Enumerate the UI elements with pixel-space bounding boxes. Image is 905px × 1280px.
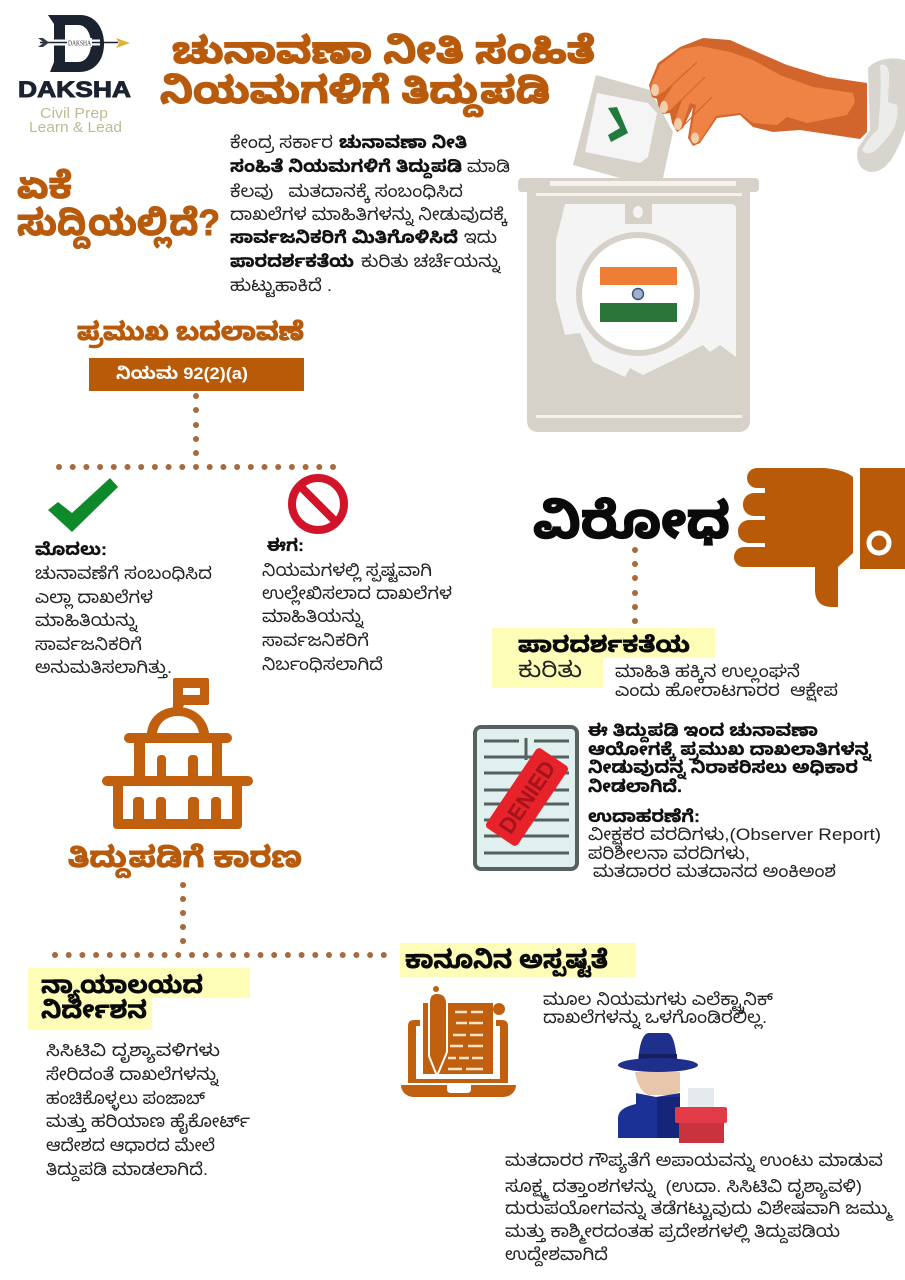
ballot paper [573, 75, 673, 178]
text block: original rules: ಮೂಲ ನಿಯಮಗಳು ಎಲೆಕ್ಟ್ರಾನಿಕ್ [543, 990, 774, 1014]
text block: why in the news: ಸಂಹಿತೆ ನಿಯಮಗಳಿಗೆ ತಿದ್ದುಪಡಿ [230, 157, 462, 179]
text block: election commission power: ಆಯೋಗಕ್ಕೆ ಪ್ರಮುಖ ದಾಖಲಾತಿಗಳನ್ನ [588, 740, 872, 762]
heading: why in the news: ಸುದ್ದಿಯಲ್ಲಿದೆ? [17, 202, 220, 249]
text block: why in the news: ಚುನಾವಣಾ ನೀತಿ [339, 133, 467, 152]
icon: government building [102, 678, 253, 829]
text block: why in the news: ಕೆಲವು ಮತದಾನಕ್ಕೆ ಸಂಬಂಧಿಸಿದ [230, 182, 463, 204]
callout: about transparency: ಪಾರದರ್ಶಕತೆಯ [518, 632, 690, 657]
text block: now: ಸಾರ್ವಜನಿಕರಿಗೆ [262, 631, 369, 650]
callout: legal ambiguity [400, 943, 636, 978]
text block: election commission power [588, 721, 872, 796]
heading: why in the news [17, 165, 220, 249]
dotted connector: reasons [52, 882, 387, 958]
text block: court direction: ಹಂಚಿಕೊಳ್ಳಲು ಪಂಜಾಬ್ [46, 1089, 206, 1111]
text block: original rules [543, 990, 774, 1030]
text block: voter privacy: ಸೂಕ್ಷ್ಮ ದತ್ತಾಂಶಗಳನ್ನು (ಉದಾ. ಸಿಸಿಟಿವಿ ದೃಶ್ಯಾವಳಿ) [505, 1177, 862, 1201]
callout: court direction: ನಿರ್ದೇಶನ [41, 997, 147, 1024]
dotted connector: opposition [632, 547, 638, 624]
text block: before: ಎಲ್ಲಾ ದಾಖಲೆಗಳ [35, 588, 153, 610]
title: ನಿಯಮಗಳಿಗೆ ತಿದ್ದುಪಡಿ [160, 70, 550, 117]
dotted connector: rule to before and now [56, 393, 336, 470]
text block: court direction: ಸಿಸಿಟಿವಿ ದೃಶ್ಯಾವಳಿಗಳು [46, 1041, 220, 1064]
text block: before: ಅನುಮತಿಸಲಾಗಿತ್ತು. [35, 658, 172, 679]
callout: court direction: ನ್ಯಾಯಾಲಯದ [41, 972, 203, 1004]
text block: why in the news: ಪಾರದರ್ಶಕತೆಯ [230, 252, 354, 271]
icon: prohibited sign [292, 478, 344, 530]
text block: why in the news: ಇದು [464, 228, 497, 247]
text block: why in the news: ಸಾರ್ವಜನಿಕರಿಗೆ ಮಿತಿಗೊಳಿಸಿದೆ [230, 228, 458, 247]
text block: now: ಈಗ: [267, 536, 304, 555]
text block: original rules: ದಾಖಲೆಗಳನ್ನು ಒಳಗೊಂಡಿರಲಿಲ್ಲ. [543, 1008, 767, 1030]
text block: court direction: ಸೇರಿದಂತೆ ದಾಖಲೆಗಳನ್ನು [46, 1065, 219, 1087]
text block: now: ನಿಯಮಗಳಲ್ಲಿ ಸ್ಪಷ್ಟವಾಗಿ [262, 561, 432, 583]
text block: why in the news [230, 133, 510, 298]
logo: Daksha Civil Prep: DAKSHA [68, 40, 91, 48]
icon: thumbs down [734, 468, 905, 607]
icon: spy with ballot box [618, 1033, 727, 1143]
text block: voter privacy: ಮತ್ತು ಕಾಶ್ಮೀರದಂತಹ ಪ್ರದೇಶಗಳಲ್ಲಿ ತಿದ್ದುಪಡಿಯ [505, 1222, 840, 1244]
logo: Daksha Civil Prep: Civil Prep [40, 105, 108, 122]
callout: about transparency: ಕುರಿತು [518, 657, 582, 682]
ballot box [518, 178, 759, 432]
text block: court direction: ಮತ್ತು ಹರಿಯಾಣ ಹೈಕೋರ್ಟ್ [46, 1112, 250, 1135]
logo: Daksha Civil Prep [18, 15, 131, 136]
callout: legal ambiguity: ಕಾನೂನಿನ ಅಸ್ಪಷ್ಟತೆ [405, 946, 608, 978]
text block: examples: ಮತದಾರರ ಮತದಾನದ ಅಂಕಿಅಂಶ [593, 862, 836, 881]
text block: activists' objection [615, 662, 838, 702]
heading: reason for amendment: ತಿದ್ದುಪಡಿಗೆ ಕಾರಣ [68, 842, 302, 878]
text block: court direction [46, 1041, 250, 1182]
denied stamp: DENIED [493, 756, 561, 838]
text block: why in the news: ಹುಟ್ಟುಹಾಕಿದೆ . [230, 276, 332, 298]
text block: activists' objection: ಎಂದು ಹೋರಾಟಗಾರರ ಆಕ್ಷೇಪ [615, 681, 838, 702]
text block: election commission power: ನೀಡುವುದನ್ನ ನಿರಾಕರಿಸಲು ಅಧಿಕಾರ [588, 758, 858, 780]
callout: about transparency [492, 628, 715, 688]
text block: before: ಸಾರ್ವಜನಿಕರಿಗೆ [35, 635, 142, 654]
callout: court direction [28, 968, 250, 1030]
text block: before: ಮಾಹಿತಿಯನ್ನು [35, 611, 138, 633]
text block: before: ಚುನಾವಣೆಗೆ ಸಂಬಂಧಿಸಿದ [35, 564, 212, 583]
title: ಚುನಾವಣಾ ನೀತಿ ಸಂಹಿತೆ [172, 30, 595, 71]
text block: before [35, 540, 212, 679]
text block: before: ಮೊದಲು: [35, 540, 107, 559]
heading: key changes: ಪ್ರಮುಖ ಬದಲಾವಣೆ [77, 318, 304, 348]
text block: examples: ಪರಿಶೀಲನಾ ವರದಿಗಳು, [588, 844, 750, 863]
text block: now: ನಿರ್ಬಂಧಿಸಲಾಗಿದೆ [262, 655, 383, 674]
logo: Daksha Civil Prep: DAKSHA [18, 77, 131, 102]
icon: green check mark [48, 478, 118, 532]
text block: voter privacy: ಮತದಾರರ ಗೌಪ್ಯತೆಗೆ ಅಪಾಯವನ್ನು ಉಂಟು ಮಾಡುವ [505, 1151, 883, 1173]
title [160, 30, 595, 117]
icon: laptop with document and pen [401, 986, 516, 1097]
heading: opposition: ವಿರೋಧ [533, 493, 730, 549]
text block: election commission power: ನೀಡಲಾಗಿದೆ. [588, 777, 682, 796]
text block: why in the news: ದಾಖಲೆಗಳ ಮಾಹಿತಿಗಳನ್ನು ನೀಡುವುದಕ್ಕೆ [230, 205, 508, 227]
text block: examples: ವೀಕ್ಷಕರ ವರದಿಗಳು,(Observer Report) [588, 825, 881, 846]
text block: now: ಉಲ್ಲೇಖಿಸಲಾದ ದಾಖಲೆಗಳ [262, 584, 452, 606]
banner: rule 92(2)(a): ನಿಯಮ 92(2)(a) [116, 364, 248, 383]
text block: now [262, 536, 452, 674]
text block: now: ಮಾಹಿತಿಯನ್ನು [262, 607, 364, 629]
text block: examples: ಉದಾಹರಣೆಗೆ: [588, 807, 700, 826]
heading: why in the news: ಏಕೆ [17, 165, 72, 206]
text block: court direction: ಆದೇಶದ ಆಧಾರದ ಮೇಲೆ [46, 1136, 215, 1155]
text block: voter privacy: ಉದ್ದೇಶವಾಗಿದೆ [505, 1245, 608, 1267]
text block: activists' objection: ಮಾಹಿತಿ ಹಕ್ಕಿನ ಉಲ್ಲಂಘನೆ [615, 662, 800, 684]
text block: court direction: ತಿದ್ದುಪಡಿ ಮಾಡಲಾಗಿದೆ. [46, 1160, 208, 1182]
text block: why in the news: ಮಾಡಿ [467, 157, 510, 176]
banner: rule 92(2)(a) [89, 358, 304, 391]
text block: why in the news: ಕೇಂದ್ರ ಸರ್ಕಾರ [230, 133, 333, 154]
text block: why in the news: ಕುರಿತು ಚರ್ಚೆಯನ್ನು [361, 252, 501, 274]
text block: voter privacy [505, 1151, 895, 1267]
text block: voter privacy: ದುರುಪಯೋಗವನ್ನು ತಡೆಗಟ್ಟುವುದು ವಿಶೇಷವಾಗಿ ಜಮ್ಮು [505, 1199, 895, 1221]
flag of India [600, 267, 677, 322]
logo: Daksha Civil Prep: Learn & Lead [29, 119, 122, 136]
icon: ballot box with hand [518, 38, 905, 432]
text block: examples [588, 807, 881, 881]
hand [649, 38, 905, 172]
icon: denied document [475, 727, 577, 869]
text block: election commission power: ಈ ತಿದ್ದುಪಡಿ ಇಂದ ಚುನಾವಣಾ [588, 721, 818, 743]
